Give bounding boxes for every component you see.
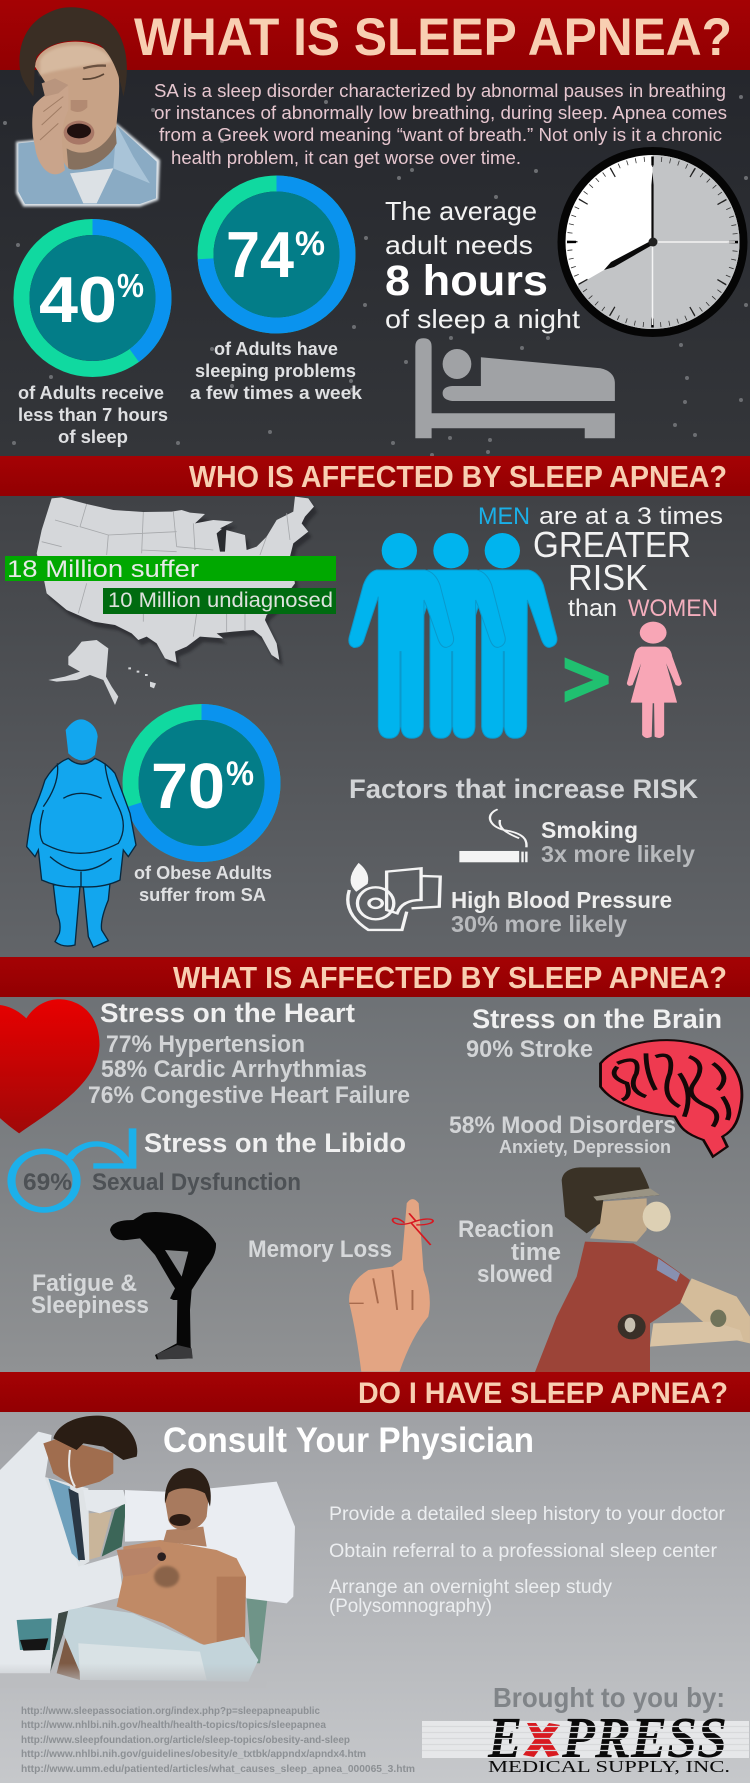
text: eight hours <box>385 196 581 334</box>
caption: 74 percent: of Adults have <box>214 338 338 359</box>
section heading band <box>0 957 750 997</box>
text: men greater risk: GREATER <box>533 524 691 565</box>
donut: 74 percent: 74 <box>226 218 294 291</box>
text: steps: (Polysomnography) <box>329 1595 492 1617</box>
logo: Express Medical Supply: PRESS <box>561 1705 727 1770</box>
logo: Express Medical Supply: MEDICAL SUPPLY, INC. <box>488 1757 730 1776</box>
text: steps: Provide a detailed sleep history to your doctor <box>329 1503 726 1525</box>
intro text <box>154 81 727 168</box>
label: fatigue: Sleepiness <box>31 1292 149 1319</box>
text: sources: http://www.umm.edu/patiented/articles/what_causes_sleep_apnea_000065_3.htm <box>21 1764 415 1775</box>
text: stress on the heart: 58% Cardic Arrhythmias <box>101 1056 367 1083</box>
header band <box>0 0 750 70</box>
caption: 74 percent: a few times a week <box>190 382 363 403</box>
donut: 74 percent: % <box>295 225 325 263</box>
donut: 40 percent: % <box>117 267 144 304</box>
donut: 74 percent <box>206 184 348 326</box>
text: steps: Obtain referral to a professional sleep center <box>329 1540 718 1562</box>
label: fatigue <box>31 1270 149 1319</box>
logo: Express Medical Supply: E <box>487 1705 522 1770</box>
text: men greater risk: are at a 3 times <box>539 503 723 530</box>
caption: 40 percent: of Adults receive <box>18 382 164 403</box>
photo: doctor and patient <box>0 1416 295 1688</box>
text: stress on the heart <box>88 998 410 1109</box>
icon: male symbol <box>11 1128 133 1210</box>
text: eight hours: The average <box>385 196 537 226</box>
text: blood pressure: High Blood Pressure <box>451 887 672 913</box>
text: mood disorders: Anxiety, Depression <box>499 1137 671 1157</box>
text: stress on the brain: 90% Stroke <box>466 1036 593 1063</box>
label: fatigue: Fatigue & <box>32 1270 137 1297</box>
bar: 18 million: 18 Million suffer <box>7 556 199 583</box>
caption: 74 percent: sleeping problems <box>195 360 356 381</box>
text: men greater risk: MEN <box>478 503 530 530</box>
caption: 74 percent <box>190 338 363 403</box>
text: mood disorders <box>449 1112 676 1157</box>
intro text: from a Greek word meaning “want of breath.” Not only is it a chronic <box>159 125 722 145</box>
icon: three men <box>349 533 557 738</box>
photo: yawning man <box>16 7 160 207</box>
text: stress on the brain <box>466 1004 722 1063</box>
caption: 40 percent: of sleep <box>58 426 128 447</box>
map: United States <box>37 497 317 705</box>
label: memory loss: Memory Loss <box>248 1236 392 1263</box>
icon: woman <box>627 622 682 738</box>
text: blood pressure: 30% more likely <box>451 911 627 937</box>
donut: 40 percent <box>22 227 164 369</box>
text: men greater risk: RISK <box>568 557 648 598</box>
label: reaction time: time <box>511 1239 561 1266</box>
text: stress on the heart: Stress on the Heart <box>100 998 355 1028</box>
panel: what is sleep apnea <box>0 0 750 457</box>
text: eight hours: 8 hours <box>385 257 548 305</box>
logo: Express Medical Supply <box>422 1705 749 1776</box>
icon: obese person <box>27 719 136 947</box>
caption: 40 percent <box>18 382 168 447</box>
text: men greater risk: WOMEN <box>628 595 718 622</box>
text: blood pressure <box>451 887 672 937</box>
text: sources: http://www.sleepfoundation.org/article/sleep-topics/obesity-and-sleep <box>21 1735 350 1746</box>
panel: who is affected <box>0 456 750 957</box>
text: smoking <box>541 817 695 867</box>
icon: greater than <box>565 657 609 703</box>
section heading band <box>0 1372 750 1412</box>
icon: finger with ribbon <box>349 1199 433 1372</box>
text: sources: http://www.nhlbi.nih.gov/guidelines/obesity/e_txtbk/appndx/apndx4.htm <box>21 1749 366 1760</box>
section heading band <box>0 456 750 496</box>
icon: clock <box>562 151 744 333</box>
icon: heart <box>0 999 100 1133</box>
label: reaction time: Reaction <box>458 1216 554 1243</box>
text: men greater risk: than <box>568 595 617 622</box>
donut: 70 percent <box>130 712 272 854</box>
text: stress on the brain: Stress on the Brain <box>472 1004 722 1034</box>
text: men greater risk <box>478 503 723 622</box>
text: stress on the heart: 77% Hypertension <box>106 1031 305 1058</box>
text: mood disorders: 58% Mood Disorders <box>449 1112 676 1139</box>
text: smoking: Smoking <box>541 817 638 843</box>
text: smoking: 3x more likely <box>541 841 695 867</box>
caption: 70 percent <box>134 862 272 905</box>
icon: bed <box>415 338 615 438</box>
text: eight hours: adult needs <box>385 230 533 260</box>
text: brought to you by: Brought to you by: <box>493 1682 725 1713</box>
icon: tired person <box>110 1212 216 1359</box>
text: sources: http://www.nhlbi.nih.gov/health/health-topics/topics/sleepapnea <box>21 1720 326 1731</box>
icon: blood pressure cuff <box>348 865 440 930</box>
text: stress on the heart: 76% Congestive Heart Failure <box>88 1082 410 1109</box>
label: reaction time: slowed <box>477 1261 553 1288</box>
caption: 70 percent: suffer from SA <box>139 884 266 905</box>
donut: 70 percent: 70 <box>151 750 225 822</box>
caption: 70 percent: of Obese Adults <box>134 862 272 883</box>
text: stress on the libido: Stress on the Libido <box>144 1128 406 1158</box>
intro text: health problem, it can get worse over time. <box>171 148 521 168</box>
bar: 18 million <box>5 556 336 583</box>
donut: 70 percent: % <box>226 755 254 793</box>
text: steps: Arrange an overnight sleep study <box>329 1576 612 1598</box>
photo: batter hit by ball <box>535 1167 750 1372</box>
panel: do I have sleep apnea <box>0 1372 750 1783</box>
panel: what is affected <box>0 957 750 1373</box>
text: sources: http://www.sleepassociation.org/index.php?p=sleepapneapublic <box>21 1706 320 1717</box>
text: steps <box>329 1503 726 1617</box>
text: eight hours: of sleep a night <box>385 304 581 334</box>
text: sources <box>21 1706 415 1775</box>
icon: brain <box>601 1040 742 1157</box>
intro text: or instances of abnormally low breathing, during sleep. Apnea comes <box>154 103 727 123</box>
intro text: SA is a sleep disorder characterized by abnormal pauses in breathing <box>154 81 726 101</box>
text: stress on the libido: 69% <box>23 1169 72 1196</box>
text: stress on the libido: Sexual Dysfunction <box>92 1169 301 1196</box>
icon: cigarette <box>459 809 526 862</box>
heading: consult your physician: Consult Your Physician <box>163 1421 534 1460</box>
caption: 40 percent: less than 7 hours <box>18 404 168 425</box>
donut: 40 percent: 40 <box>39 263 117 336</box>
bar: 10 million: 10 Million undiagnosed <box>108 589 333 612</box>
label: reaction time <box>458 1216 561 1288</box>
heading: risk factors: Factors that increase RISK <box>349 774 699 804</box>
section heading band: DO I HAVE SLEEP APNEA? <box>358 1377 728 1410</box>
text: stress on the libido <box>23 1128 406 1196</box>
